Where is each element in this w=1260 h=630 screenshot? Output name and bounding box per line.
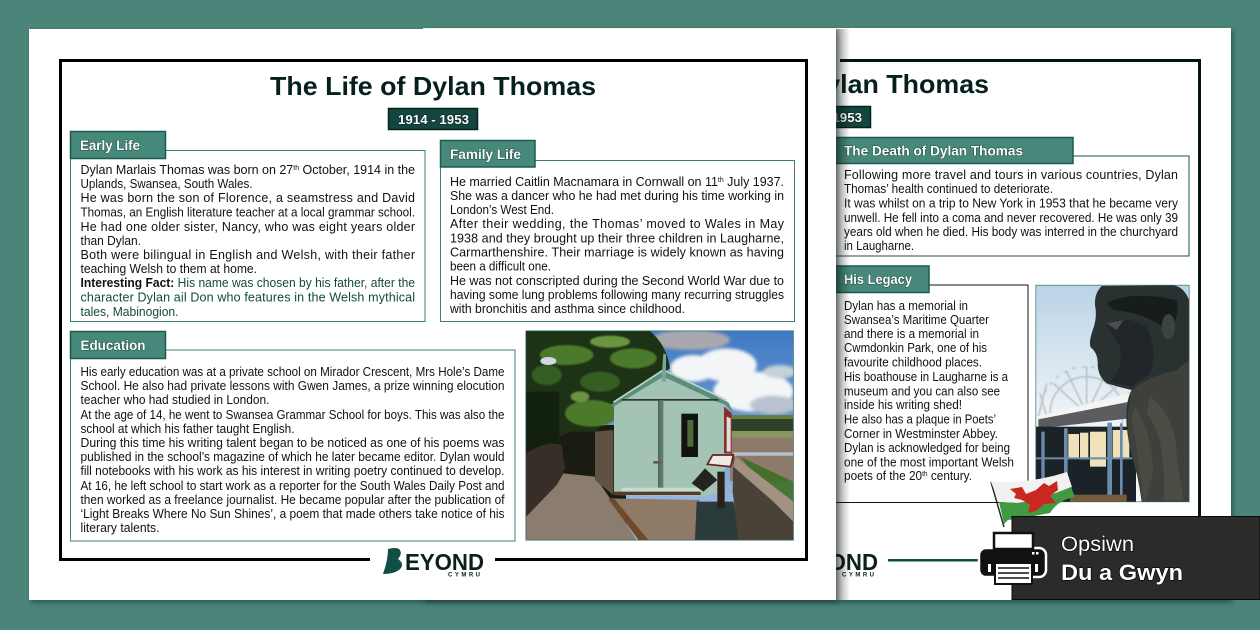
photo: Dylan Thomas statue [1036,284,1190,502]
panel: front page [29,29,838,603]
text: education: teacher who had studied in London. [80,393,270,407]
text: legacy: Swansea’s Maritime Quarter [844,313,989,327]
panel: back page [423,28,1233,603]
text: legacy: museum and you can also see [844,384,1000,398]
heading: family life: Family Life [450,146,521,162]
back page logo: CYMRU [842,572,874,578]
text: family life: July 1937. [724,175,784,189]
text: family life: She was a dancer who he had met during his time working in [450,189,784,203]
stone wall left [595,430,613,495]
statue bust [1090,285,1189,502]
interesting fact: tales, Mabinogion. [80,305,178,319]
heading: the death of Dylan Thomas [800,138,1073,164]
text: family life: with bronchitis and asthma since childhood. [449,302,685,316]
text: education: His early education was at a private school on Mirador Crescent, Mrs Hole’s Dame [80,365,505,379]
text: family life: He married Caitlin Macnamara in Cornwall on 11 [450,175,718,189]
far hills and estuary [730,415,793,432]
text: early life: than Dylan. [80,234,141,248]
panel: early life [70,132,425,322]
text: education: At 16, he left school to start work as a reporter for the South Wales Daily Post and [80,479,505,493]
clouds [650,330,797,414]
logo subtitle: CYMRU [448,572,480,578]
text: early life [80,163,415,319]
heading: education: Education [80,337,146,353]
interesting fact [80,276,415,319]
text: death: years old when he died. His body was interred in the churchyard [844,225,1178,239]
text: Du a Gwyn: Du a Gwyn [1061,560,1183,585]
panel: the death of Dylan Thomas [800,138,1189,256]
text: death: Thomas’ health continued to deteriorate. [844,182,1053,196]
text: early life: He had one older sister, Nancy, who was eight years older [80,220,415,234]
front page frame [60,60,806,560]
text: early life: He was born the son of Florence, a seamstress and David [80,191,415,205]
text: education: At the age of 14, he went to Swansea Grammar School for boys. This was also the [80,408,505,422]
text: death: in Laugharne. [844,239,914,253]
text: early life: October, 1914 in the [299,163,415,177]
photo: Dylan Thomas writing shed [526,330,794,540]
heading: early life [70,132,166,158]
panel: education [70,332,515,541]
title: The Life of Dylan Thomas [270,71,596,101]
path [526,473,637,540]
heading: the death of Dylan Thomas: The Death of Dylan Thomas [844,142,1023,158]
text: education: school at which his father taught English. [80,422,294,436]
date badge [388,108,478,130]
trees [526,331,670,440]
text: early life: Uplands, Swansea, South Wales. [80,177,252,191]
text: family life: Carmarthenshire. Their marriage is widely known as having [450,246,784,260]
shed forecourt [608,498,700,540]
text: death: It was whilst on a trip to New York in 1953 that he became very [844,196,1179,210]
text: legacy: Dylan is acknowledged for being [844,441,1010,455]
logo wordmark: EYOND [405,549,484,575]
text: Opsiwn: Opsiwn [1061,532,1134,556]
text: family life: London’s West End. [450,203,554,217]
logo: Beyond Cymru [383,548,484,578]
heading: education [70,332,166,358]
text: death [844,168,1179,253]
text: family life: After their wedding, the Thomas’ moved to Wales in May [450,217,785,231]
heading: his legacy [800,266,929,292]
text: death: unwell. He fell into a coma and never recovered. He was only 39 [844,211,1178,225]
text: legacy: one of the most important Welsh [844,456,1014,470]
text: family life: having some lung problems following many recurring struggles [450,288,784,302]
dark ground base [526,425,626,524]
back page date badge: 1914 - 1953 [791,110,862,125]
text: early life: Both were bilingual in English and Welsh, with their father [80,248,415,262]
text: family life: He was not conscripted during the Second World War due to [450,274,784,288]
text: early life: Thomas, an English literature teacher at a local grammar school. [80,206,415,220]
text: education: fill notebooks with his work as his interest in writing poetry continued to develop. [80,464,504,478]
back page footer rule [888,559,980,562]
text: legacy: inside his writing shed! [844,398,962,412]
information board [692,468,717,492]
text: family life [449,175,785,316]
text: education: literary talents. [80,521,160,535]
interesting fact: character Dylan ail Don who features in the Welsh mythical [80,290,415,304]
text: legacy: favourite childhood places. [844,356,982,370]
text: early life: teaching Welsh to them at home. [80,262,257,276]
text: legacy: and there is a memorial in [844,327,979,341]
text: legacy: Corner in Westminster Abbey. [844,427,998,441]
date badge: 1914 - 1953 [398,112,469,127]
wall right and shrubs [740,457,793,512]
text: education: then worked as a freelance journalist. He became popular after the publication of [80,493,505,507]
text: legacy: Dylan has a memorial in [844,299,968,313]
text: legacy: His boathouse in Laugharne is a [844,370,1008,384]
back page title: The Life of Dylan Thomas [663,69,989,99]
shed [614,373,725,497]
text: legacy [844,299,1014,483]
shadow from front page [836,29,850,600]
text: legacy: th [922,471,928,478]
text: legacy: He also has a plaque in Poets’ [844,412,996,426]
back page date badge [782,106,870,128]
banner: black and white option [979,516,1260,600]
logo letter B [383,548,402,574]
text: education: During this time his writing talent began to be noticed as one of his poems was [80,436,504,450]
interesting fact: Interesting Fact: His name was chosen by his father, after the [80,276,415,290]
text: education: School. He also had private lessons with Gwen James, a prize winning elocution [80,379,505,393]
text: early life: th [293,165,299,172]
back page frame [840,60,1200,520]
icon: Welsh flag [991,472,1075,527]
text: death: Following more travel and tours in various countries, Dylan [844,168,1178,182]
text: education [80,365,505,535]
icon: printer [979,533,1046,584]
text: education: ‘Light Breaks Where No Sun Shines’, a poem that made others take notice of his [80,507,504,521]
text: legacy: Cwmdonkin Park, one of his [844,341,987,355]
panel: his legacy [800,266,1028,502]
heading: family life [440,140,535,167]
heading: early life: Early Life [80,137,140,153]
text: education: published in the school’s magazine of which he later became editor. Dylan would [80,450,505,464]
text: family life: th [718,177,724,184]
panel: family life [440,140,794,322]
heading: his legacy: His Legacy [844,271,912,287]
text: family life: 1938 and they brought up their three children in Laugharne, [450,232,784,246]
text: early life: Dylan Marlais Thomas was born on 27 [80,163,293,177]
text: family life: been a difficult one. [450,260,551,274]
text: legacy: poets of the 20 [844,469,927,483]
text: legacy: century. [928,469,972,483]
back page logo: EYOND [799,549,878,575]
